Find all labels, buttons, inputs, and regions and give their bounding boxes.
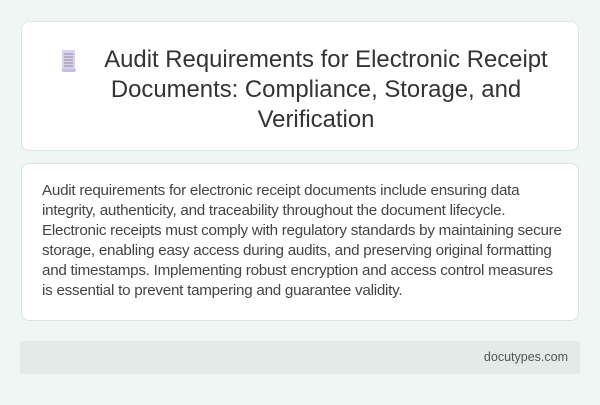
footer text: docutypes.com: [484, 350, 568, 364]
description text: and timestamps. Implementing robust encryption and access control measures: [42, 262, 553, 279]
icon: receipt: [61, 50, 76, 72]
description text: Electronic receipts must comply with regulatory standards by maintaining secure: [42, 222, 562, 239]
title card: [21, 21, 579, 151]
footer bar: [20, 341, 580, 374]
description text: is essential to prevent tampering and guarantee validity.: [42, 282, 402, 299]
description text: integrity, authenticity, and traceability throughout the document lifecycle.: [42, 202, 505, 219]
description text: [42, 182, 562, 299]
description text: Audit requirements for electronic receipt documents include ensuring data: [42, 182, 519, 199]
description card: [21, 163, 579, 321]
description text: storage, enabling easy access during audits, and preserving original formatting: [42, 242, 552, 259]
title: Audit Requirements for Electronic Receipt Documents: Compliance, Storage, and Verification: [104, 46, 548, 133]
